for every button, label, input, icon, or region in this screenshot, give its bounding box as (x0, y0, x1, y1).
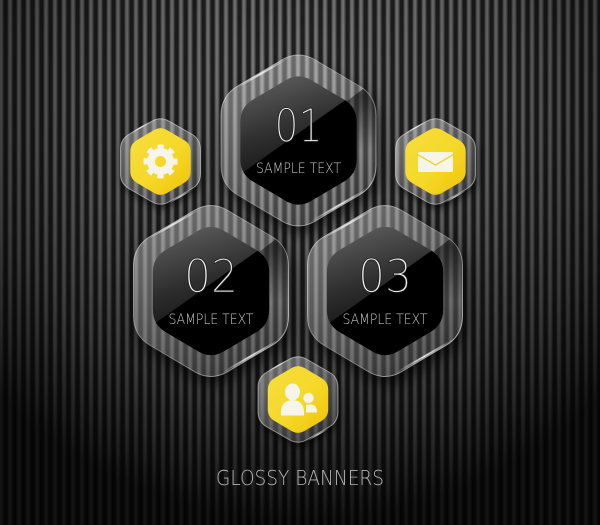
icon badge: gear (121, 119, 202, 209)
banner 03 (285, 206, 515, 391)
icon badge: users (258, 357, 339, 447)
number 02: 02 (184, 250, 238, 303)
number 03: 03 (358, 250, 412, 303)
sample text 01: SAMPLE TEXT (256, 161, 341, 177)
sample text 03: SAMPLE TEXT (342, 312, 428, 328)
number 01: 01 (274, 100, 322, 152)
banner 01 (198, 55, 428, 240)
banner 02 (111, 206, 341, 391)
title: GLOSSY BANNERS (216, 466, 384, 490)
sample text 02: SAMPLE TEXT (168, 312, 254, 328)
icon badge: mail (396, 119, 477, 209)
